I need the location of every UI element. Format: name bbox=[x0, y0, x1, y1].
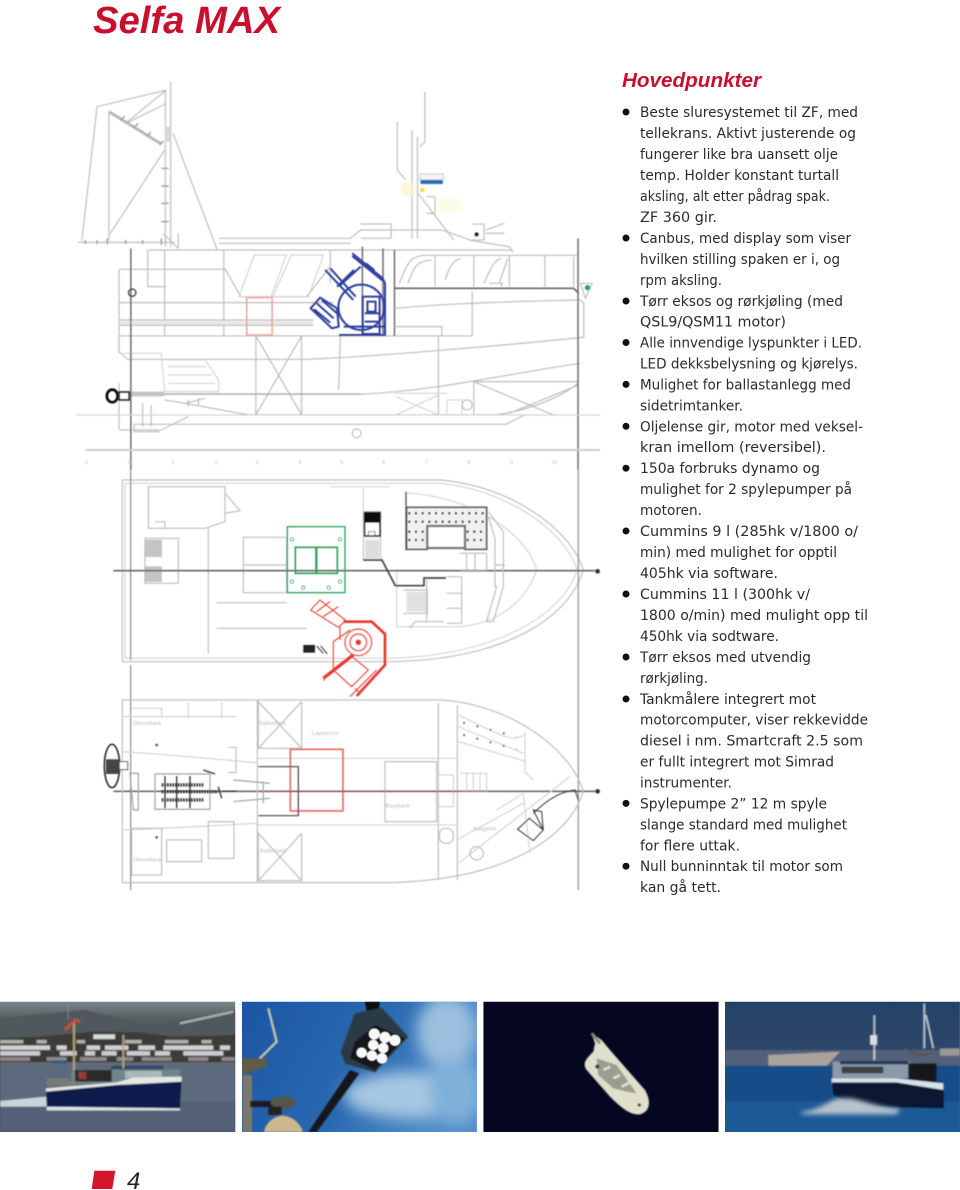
green navigation light bbox=[580, 283, 592, 298]
list item: Beste sluresystemet til ZF, med bbox=[640, 105, 858, 121]
list item: ZF 360 gir. bbox=[640, 210, 717, 226]
list item: kan gå tett. bbox=[640, 879, 721, 896]
frame scale numbers: 7 bbox=[425, 460, 428, 466]
compartment labels: Baugtank bbox=[385, 803, 410, 809]
list item: Tørr eksos og rørkjøling (med bbox=[639, 294, 843, 310]
title: Selfa MAX: Selfa MAX bbox=[93, 0, 283, 42]
list item: Tankmålere integrert mot bbox=[639, 691, 816, 708]
wheelhouse console bbox=[363, 512, 446, 586]
compartment labels: Baugtank bbox=[473, 827, 497, 833]
list item: Null bunninntak til motor som bbox=[640, 859, 843, 875]
list item bbox=[622, 650, 811, 687]
center lines bbox=[113, 569, 600, 794]
list item bbox=[622, 524, 858, 582]
list item: 450hk via sodtware. bbox=[640, 629, 779, 645]
page marker bbox=[92, 1171, 115, 1189]
list item bbox=[622, 294, 843, 330]
photo: vessel from above at night bbox=[483, 1002, 719, 1132]
seating with dots bbox=[403, 492, 505, 628]
red winch bbox=[311, 600, 385, 697]
rudder bbox=[104, 744, 128, 788]
list item: diesel i nm. Smartcraft 2.5 som bbox=[640, 734, 863, 750]
compartment labels: Ballasttank bbox=[260, 849, 287, 855]
compartment labels bbox=[133, 721, 497, 864]
frame scale numbers: 0 bbox=[128, 460, 131, 466]
photo: boat at speed near coastal town bbox=[0, 1002, 235, 1132]
list item: min) med mulighet for opptil bbox=[640, 545, 837, 561]
list item: fungerer like bra uansett olje bbox=[640, 147, 838, 163]
list item bbox=[622, 419, 863, 456]
red centre line bbox=[263, 790, 487, 793]
frame scale numbers: 10 bbox=[551, 460, 557, 466]
frame scale numbers bbox=[84, 460, 557, 466]
frame scale numbers: -1 bbox=[84, 460, 88, 466]
list item: temp. Holder konstant turtall bbox=[640, 168, 839, 184]
anchor gear bbox=[518, 790, 578, 841]
list item: Oljelense gir, motor med veksel- bbox=[640, 419, 863, 435]
list item bbox=[622, 859, 843, 896]
deck line bbox=[394, 288, 579, 293]
compartment labels: Lasterom bbox=[312, 731, 339, 737]
frame scale numbers: 9 bbox=[510, 460, 513, 466]
list item: Canbus, med display som viser bbox=[640, 231, 851, 247]
vertical reference lines bbox=[131, 470, 578, 890]
frame lines bbox=[77, 238, 600, 470]
frame scale numbers: 2 bbox=[215, 460, 218, 466]
list item: Cummins 11 l (300hk v/ bbox=[640, 587, 810, 603]
dark compartment bbox=[258, 767, 298, 816]
list item: rørkjøling. bbox=[640, 671, 708, 687]
deck plan outline bbox=[122, 480, 583, 662]
list item: Tørr eksos med utvendig bbox=[639, 650, 811, 666]
frame scale numbers: 3 bbox=[256, 460, 259, 466]
drawing: side elevation of vessel bbox=[77, 82, 600, 470]
list item: slange standard med mulighet bbox=[640, 817, 847, 833]
crane mast and boom bbox=[78, 82, 217, 249]
engine bbox=[130, 770, 270, 810]
list item: aksling, alt etter pådrag spak. bbox=[640, 188, 830, 205]
propeller ring bbox=[107, 390, 129, 402]
list item: 405hk via software. bbox=[640, 566, 778, 582]
list item: QSL9/QSM11 motor) bbox=[640, 314, 786, 330]
frame scale numbers: 1 bbox=[171, 460, 174, 466]
frame scale numbers: 4 bbox=[298, 460, 302, 466]
list item bbox=[622, 105, 858, 226]
list item: motoren. bbox=[640, 503, 702, 519]
list item: kran imellom (reversibel). bbox=[640, 440, 826, 456]
list item bbox=[622, 336, 862, 372]
list item bbox=[622, 587, 868, 645]
photo: boat on blue water with bow wave bbox=[725, 1002, 960, 1132]
list item bbox=[622, 796, 847, 854]
list item bbox=[622, 231, 851, 289]
list item: for flere uttak. bbox=[640, 838, 740, 854]
list item: instrumenter. bbox=[640, 775, 732, 791]
red hatch outline bbox=[290, 749, 343, 811]
frame scale numbers: 5 bbox=[340, 460, 343, 466]
red deck outline bbox=[247, 298, 272, 335]
hull bbox=[119, 292, 584, 432]
photo: LED work light against sky bbox=[242, 995, 483, 1132]
list item: Alle innvendige lyspunkter i LED. bbox=[640, 336, 862, 352]
heading: Hovedpunkter: Hovedpunkter bbox=[622, 70, 762, 92]
list item: Cummins 9 l (285hk v/1800 o/ bbox=[640, 524, 858, 540]
blue winch bbox=[311, 253, 385, 335]
list item: tellekrans. Aktivt justerende og bbox=[640, 126, 856, 142]
radar mast bbox=[397, 92, 504, 240]
tank plan outline bbox=[122, 700, 583, 883]
frame scale numbers: 6 bbox=[382, 460, 385, 466]
list item bbox=[622, 377, 851, 414]
list item: rpm aksling. bbox=[640, 273, 722, 289]
list item bbox=[622, 691, 868, 791]
compartment labels: Dieseltank bbox=[133, 721, 162, 727]
frame scale numbers: 8 bbox=[467, 460, 471, 466]
list item: 150a forbruks dynamo og bbox=[640, 461, 820, 477]
list item: er fullt integrert mot Simrad bbox=[640, 754, 834, 770]
wheelhouse and roof bbox=[119, 224, 577, 353]
drawing: deck plan and tank plan bbox=[104, 470, 600, 890]
list item: 1800 o/min) med mulight opp til bbox=[640, 608, 868, 624]
list item: hvilken stilling spaken er i, og bbox=[640, 252, 840, 268]
green hatch bbox=[287, 527, 345, 593]
bullet list: key points bbox=[622, 105, 868, 896]
list item: mulighet for 2 spylepumper på bbox=[640, 481, 852, 498]
black cleat symbol bbox=[303, 645, 327, 654]
list item: Mulighet for ballastanlegg med bbox=[640, 377, 851, 393]
list item: Spylepumpe 2” 12 m spyle bbox=[640, 796, 827, 812]
list item: sidetrimtanker. bbox=[640, 398, 743, 414]
compartment labels: Ballasttank bbox=[259, 721, 286, 727]
list item: LED dekksbelysning og kjørelys. bbox=[640, 356, 858, 372]
list item bbox=[622, 461, 852, 519]
list item: motorcomputer, viser rekkevidde bbox=[640, 713, 868, 729]
compartment labels: Dieseltank bbox=[133, 858, 162, 864]
